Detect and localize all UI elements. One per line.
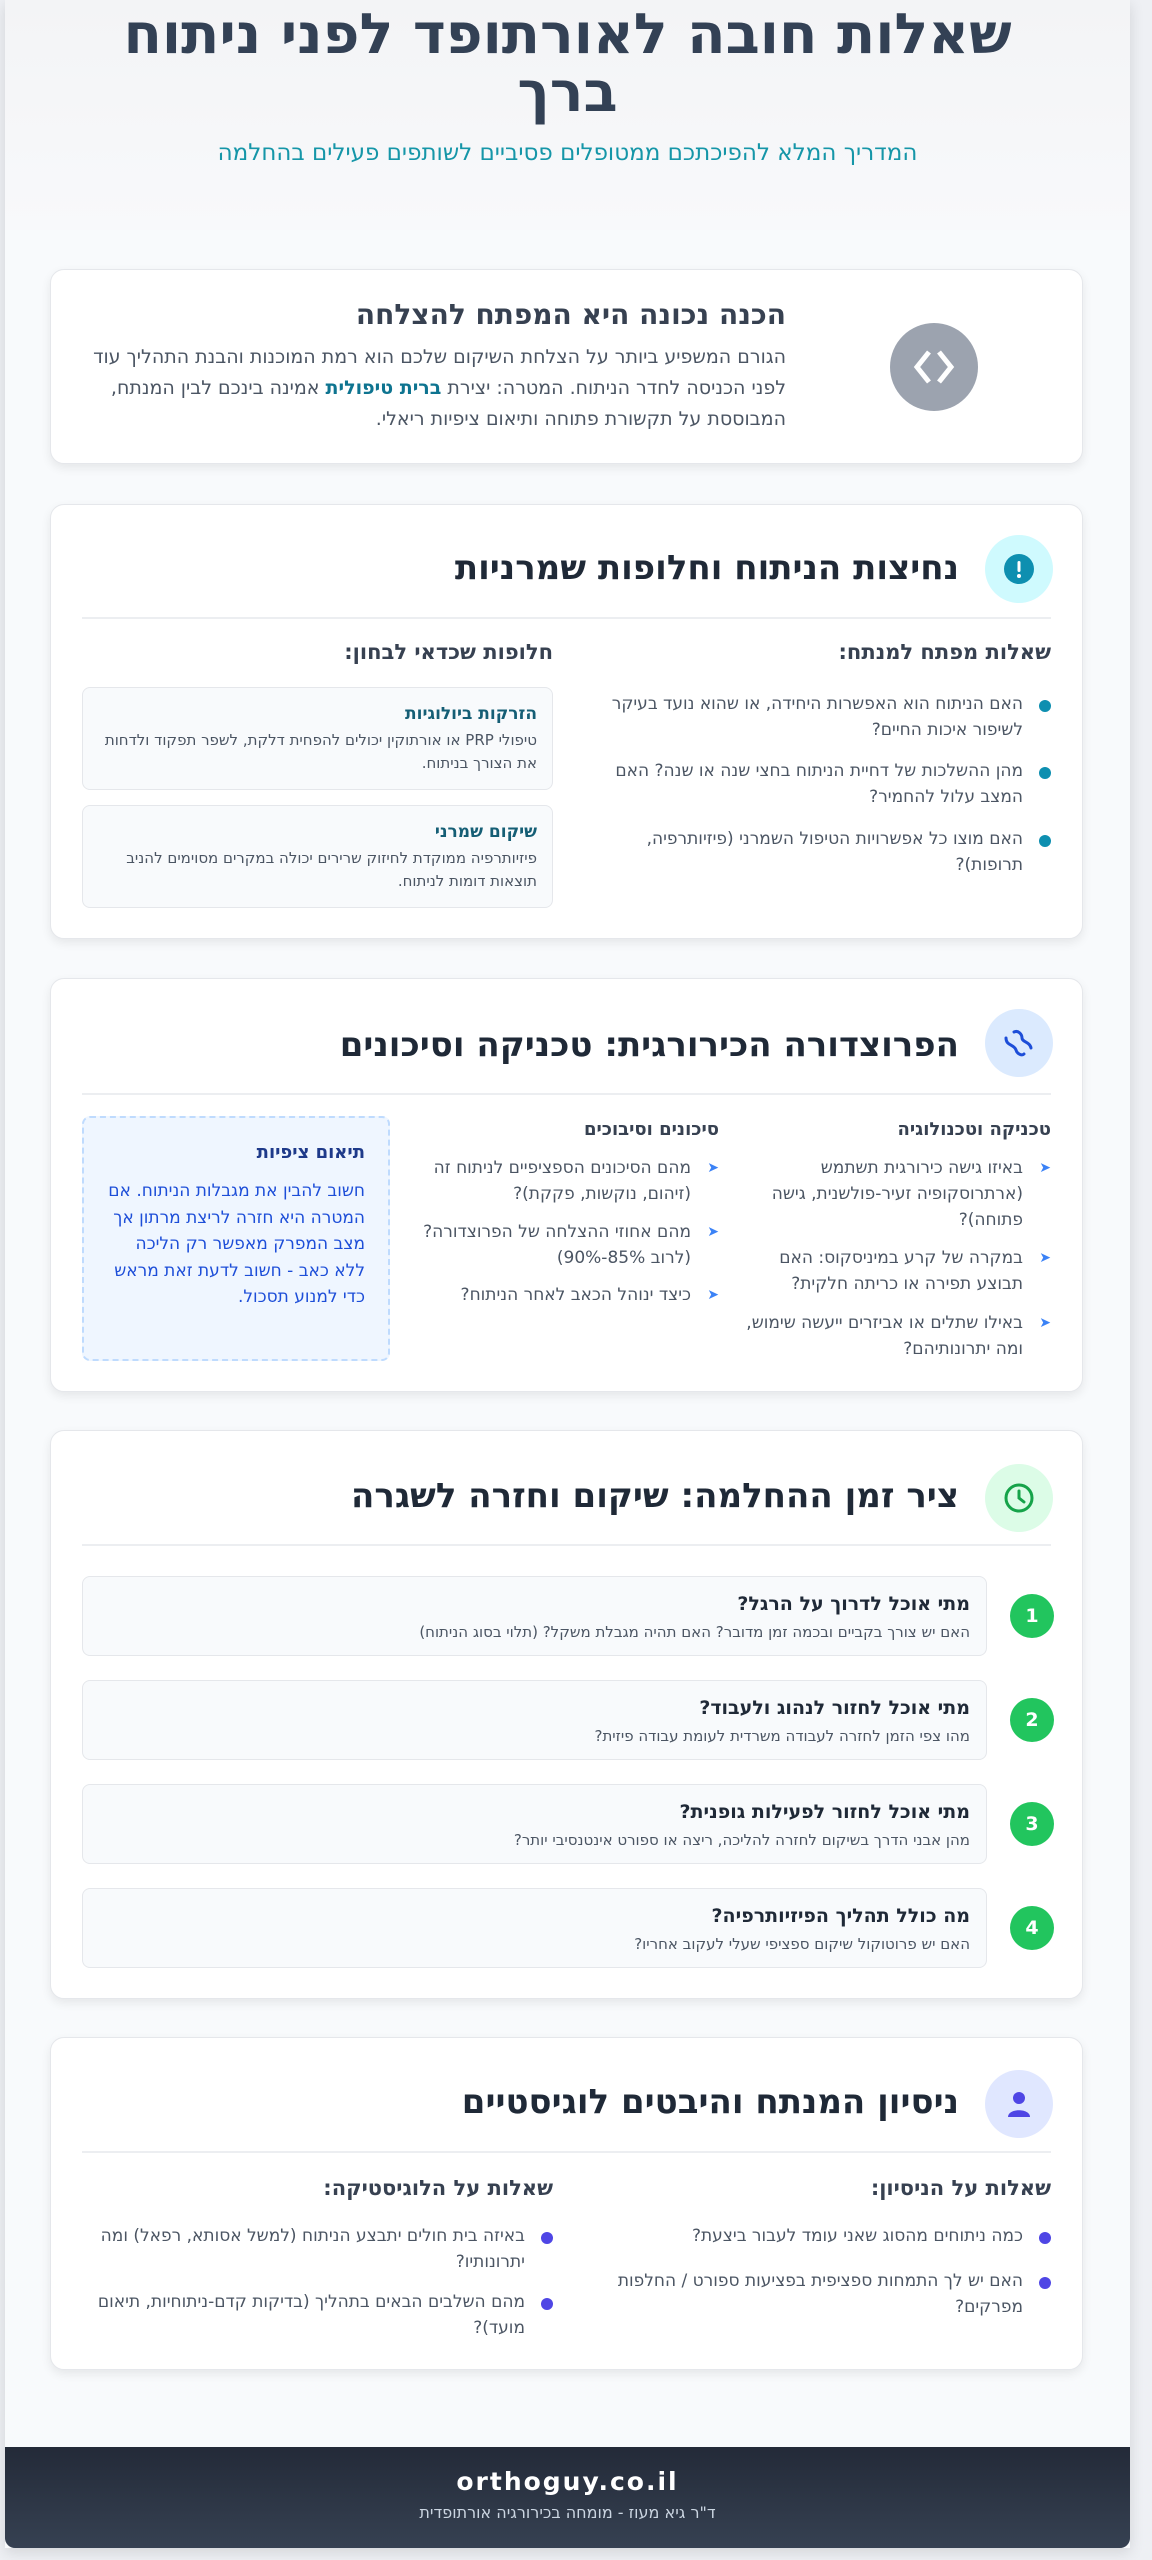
- icon: exclamation: [985, 535, 1053, 603]
- step 2: מתי אוכל לחזור לנהוג ולעבוד?: [699, 1697, 970, 1719]
- step 3: מתי אוכל לחזור לפעילות גופנית?: [680, 1801, 970, 1823]
- title: [123, 2, 1012, 125]
- text: intro: הגורם המשפיע ביותר על הצלחת השיקום שלכם הוא רמת המוכנות והבנת התהליך עוד לפני הכניסה לחדר הניתוח. המטרה: יצירת ברית טיפולית אמינה בינכם לבין המנתח, המבוססת על תקשורת פתוחה ותיאום ציפיות ריאלי.: [93, 346, 786, 430]
- icon: code chevrons: [890, 323, 978, 411]
- column: technique: באיזו גישה כירורגית תשתמש (ארתרוסקופיה זעיר-פולשנית, גישה פתוחה)?: [772, 1158, 1023, 1230]
- box: conservative rehab: פיזיותרפיה ממוקדת לחיזוק שרירים יכולה במקרים מסוימים להניב תוצאות דומות לניתוח.: [126, 849, 537, 890]
- column: alternatives: [82, 640, 553, 908]
- step 3: [82, 1784, 1054, 1864]
- title: ברך: [517, 60, 618, 125]
- box: conservative rehab: [82, 805, 553, 908]
- step 4: האם יש פרוטוקול שיקום ספציפי שעלי לעקוב אחריו?: [634, 1935, 970, 1953]
- column: alternatives: חלופות שכדאי לבחון:: [344, 640, 553, 664]
- panel: surgeon experience & logistics: [50, 2037, 1083, 2370]
- column: key questions: האם הניתוח הוא האפשרות היחידה, או שהוא נועד בעיקר לשיפור איכות החיים?: [612, 694, 1023, 740]
- column: key questions: מהן ההשלכות של דחיית הניתוח בחצי שנה או שנה? האם המצב עלול להחמיר?: [615, 761, 1023, 807]
- column: logistics: שאלות על הלוגיסטיקה:: [323, 2176, 553, 2200]
- column: logistics: [98, 2176, 553, 2338]
- step 1: האם יש צורך בקביים ובכמה זמן מדובר? האם תהיה מגבלת משקל? (תלוי בסוג הניתוח): [419, 1623, 970, 1641]
- column: key questions: האם מוצו כל אפשרויות הטיפול השמרני (פיזיותרפיה, תרופות)?: [647, 829, 1023, 875]
- callout: expectations: תיאום ציפיות: [257, 1142, 365, 1163]
- column: technique: באילו שתלים או אביזרים ייעשה שימוש, ומה יתרונותיהם?: [746, 1313, 1023, 1359]
- step 1: [82, 1576, 1054, 1656]
- heading: הפרוצדורה הכירורגית: טכניקה וסיכונים: [340, 1025, 959, 1065]
- subtitle: המדריך המלא להפיכתכם ממטופלים פסיביים לשותפים פעילים בהחלמה: [218, 140, 917, 166]
- column: risks: ➤: [707, 1224, 719, 1240]
- step 4: [82, 1888, 1054, 1968]
- column: risks: מהם אחוזי ההצלחה של הפרוצדורה? (לרוב 85%-90%): [423, 1222, 691, 1268]
- callout: expectations: חשוב להבין את מגבלות הניתוח. אם המטרה היא חזרה לריצת מרתון אך מצב המפרק מאפשר רק הליכה ללא כאב - חשוב לדעת זאת מראש כדי למנוע תסכול.: [108, 1181, 365, 1307]
- column: logistics: באיזה בית חולים יתבצע הניתוח (למשל אסותא, רפאל) ומה יתרונותיו?: [101, 2226, 525, 2272]
- column: technique: ➤: [1039, 1315, 1051, 1331]
- column: risks: ➤: [707, 1287, 719, 1303]
- title: שאלות חובה לאורתופד לפני ניתוח: [123, 2, 1012, 67]
- column: technique: ➤: [1039, 1160, 1051, 1176]
- heading: ניסיון המנתח והיבטים לוגיסטיים: [462, 2082, 959, 2122]
- column: experience: כמה ניתוחים מהסוג שאני עומד לעבור ביצעת?: [692, 2226, 1023, 2246]
- step 4: 4: [1025, 1917, 1039, 1939]
- panel: recovery timeline: [50, 1430, 1083, 1999]
- column: risks: כיצד ינוהל הכאב לאחר הניתוח?: [461, 1285, 691, 1305]
- icon: wavy: [985, 1009, 1053, 1077]
- column: key questions: [612, 640, 1051, 875]
- heading: ציר זמן ההחלמה: שיקום וחזרה לשגרה: [351, 1476, 959, 1516]
- column: risks: מהם הסיכונים הספציפיים לניתוח זה (זיהום, נוקשות, פקקת)?: [434, 1158, 691, 1204]
- heading: נחיצות הניתוח וחלופות שמרניות: [455, 548, 959, 588]
- footer: site: orthoguy.co.il: [456, 2467, 679, 2496]
- box: biological injections: הזרקות ביולוגיות: [405, 704, 537, 724]
- step 1: 1: [1025, 1605, 1039, 1627]
- column: experience: [618, 2176, 1051, 2317]
- column: technique: במקרה של קרע במיניסקוס: האם תבוצע תפירה או כריתה חלקית?: [779, 1248, 1023, 1294]
- box: conservative rehab: שיקום שמרני: [435, 822, 537, 842]
- column: key questions: שאלות מפתח למנתח:: [839, 640, 1051, 664]
- step 2: 2: [1025, 1709, 1039, 1731]
- icon: person: [985, 2070, 1053, 2138]
- step 2: מהו צפי הזמן לחזרה לעבודה משרדית לעומת עבודה פיזית?: [594, 1727, 970, 1745]
- column: logistics: מהם השלבים הבאים בתהליך (בדיקות קדם-ניתוחיות, תיאום מועד)?: [98, 2292, 525, 2338]
- column: experience: שאלות על הניסיון:: [871, 2176, 1051, 2200]
- panel: necessity: [50, 504, 1083, 939]
- footer: credit: ד"ר גיא מעוז - מומחה בכירורגיה אורתופדית: [419, 2503, 716, 2522]
- column: risks: [423, 1119, 719, 1305]
- step 3: מהן אבני הדרך בשיקום לחזרה להליכה, ריצה או ספורט אינטנסיבי יותר?: [514, 1831, 970, 1849]
- column: risks: סיכונים וסיבוכים: [584, 1119, 719, 1140]
- step 4: מה כולל תהליך הפיזיותרפיה?: [712, 1905, 970, 1927]
- panel: intro: [50, 269, 1083, 464]
- box: biological injections: [82, 687, 553, 790]
- step 1: מתי אוכל לדרוך על הרגל?: [737, 1593, 970, 1615]
- column: technique: ➤: [1039, 1250, 1051, 1266]
- column: technique: טכניקה וטכנולוגיה: [898, 1119, 1051, 1140]
- footer: [5, 2447, 1130, 2548]
- column: technique: [746, 1119, 1051, 1359]
- heading: intro: הכנה נכונה היא המפתח להצלחה: [356, 298, 786, 331]
- icon: clock: [985, 1464, 1053, 1532]
- step 3: 3: [1025, 1813, 1039, 1835]
- callout: expectations: [82, 1116, 390, 1361]
- column: experience: האם יש לך התמחות ספציפית בפציעות ספורט / החלפות מפרקים?: [618, 2271, 1023, 2317]
- step 2: [82, 1680, 1054, 1760]
- box: biological injections: טיפולי PRP או אורתוקין יכולים להפחית דלקת, לשפר תפקוד ולדחות את הצורך בניתוח.: [105, 731, 537, 772]
- column: risks: ➤: [707, 1160, 719, 1176]
- panel: procedure: [50, 978, 1083, 1392]
